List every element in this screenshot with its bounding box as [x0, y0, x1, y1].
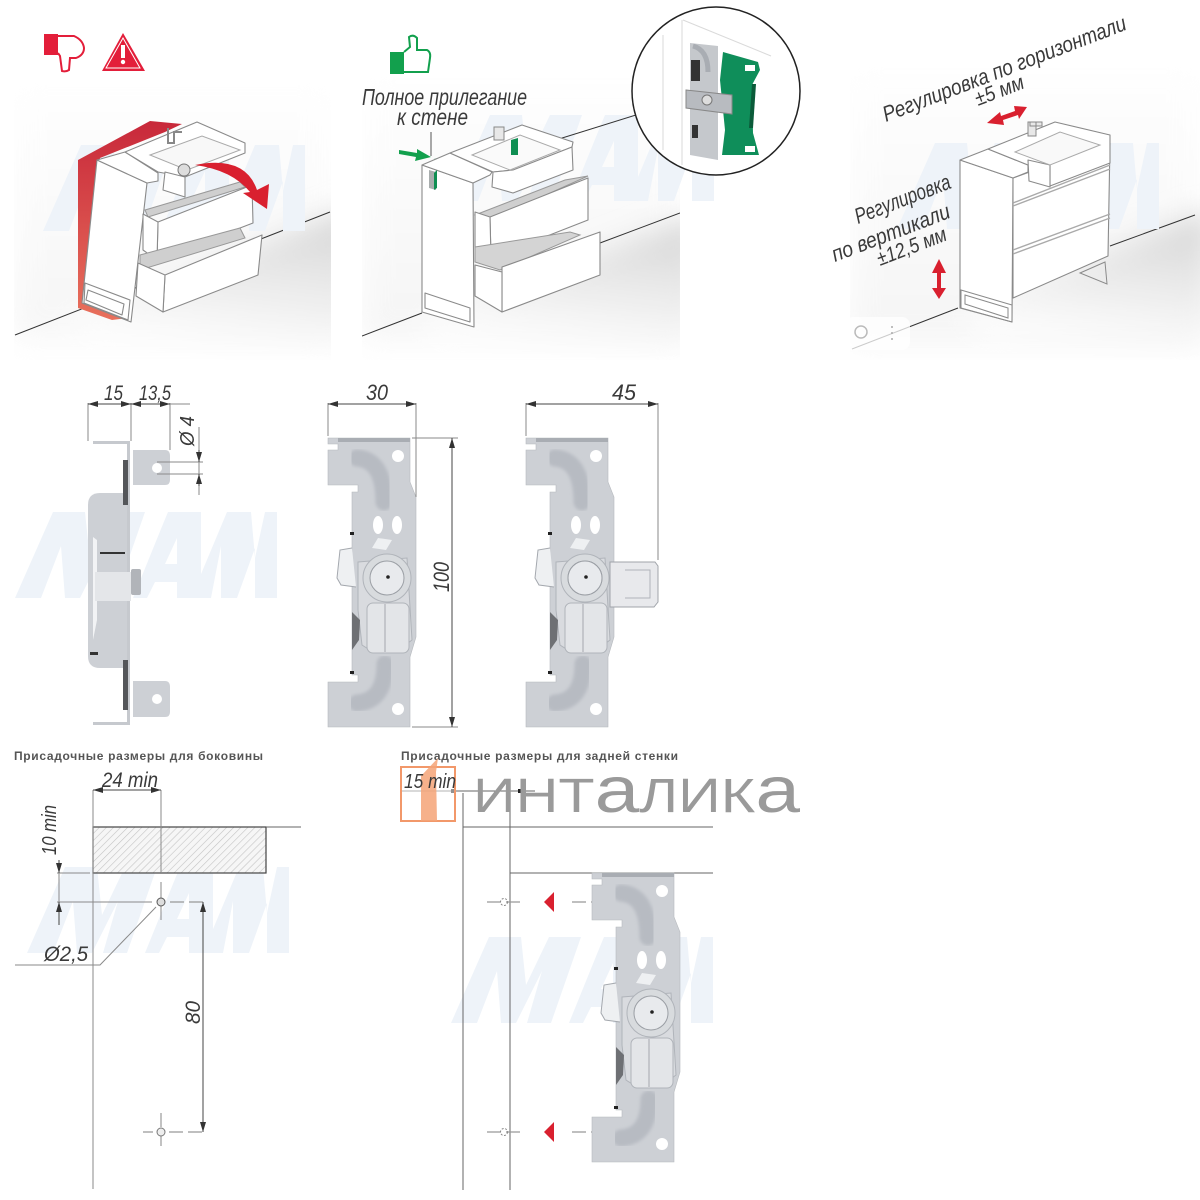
- heading: full wall contact: Полное прилегание: [362, 84, 527, 110]
- red triangle marker bottom: [544, 1122, 554, 1142]
- dimension: 45: 45: [612, 380, 637, 405]
- tilted cabinet: [82, 122, 262, 322]
- panel: back wall drilling dimensions: [400, 749, 801, 1190]
- hatched section: [93, 827, 301, 873]
- label: 80: 80: [182, 1001, 205, 1024]
- callout circle: bracket detail: [632, 7, 800, 175]
- label: 10 min: 10 min: [39, 805, 61, 855]
- dimension: 100: [412, 438, 458, 727]
- pointer line: [430, 132, 432, 156]
- watermark: [897, 143, 1159, 229]
- watermark: [451, 937, 713, 1023]
- back wall bracket: [592, 873, 680, 1162]
- panel: wrong installation: [14, 33, 331, 336]
- heading: full wall contact: [362, 84, 527, 130]
- dimension lines: [15, 790, 207, 1189]
- tipping arrow: [195, 163, 269, 209]
- watermark: [452, 115, 714, 201]
- icon: thumbs down: [44, 34, 84, 71]
- heading: vertical adjustment: по вертикали: [828, 199, 953, 267]
- sink: [125, 122, 245, 177]
- panel: side drilling dimensions: [14, 749, 301, 1189]
- heading: vertical adjustment: [828, 169, 954, 271]
- logo: Inталика: ИНТ аЛИК а: [473, 753, 801, 826]
- dimensions: 15 and 13,5: [88, 382, 190, 450]
- heading: Присадочные размеры для задней стенки: [401, 749, 678, 763]
- green arrows: [399, 149, 461, 167]
- sink: [450, 125, 573, 172]
- heading: full wall contact: к стене: [397, 104, 468, 130]
- red gap behind cabinet: [78, 121, 182, 320]
- wall and floor shading: [852, 202, 1200, 350]
- cabinet: [960, 122, 1110, 322]
- wall and floor shading: [14, 202, 331, 336]
- arrow: horizontal: [987, 106, 1027, 125]
- drawers: [145, 182, 245, 217]
- heading: vertical adjustment: ±12,5 мм: [874, 223, 950, 271]
- red triangle marker top: [544, 892, 554, 912]
- dimension: diameter 4: Ø 4: [177, 416, 199, 447]
- label: 24 min: 24 min: [101, 769, 158, 792]
- dimension: 45: [526, 380, 658, 560]
- dimensions: 15 and 13,5: 13,5: [139, 382, 171, 405]
- image search widget: [845, 317, 910, 350]
- panel: side view bracket drawing: [15, 380, 658, 727]
- side view bracket: [88, 441, 170, 725]
- icon: warning triangle: [102, 33, 145, 71]
- drawers: [475, 176, 588, 220]
- panel: adjustment: [828, 11, 1200, 350]
- label: 15 min: 15 min: [404, 771, 456, 793]
- heading: Присадочные размеры для боковины: [14, 749, 263, 763]
- icon: thumbs up: [390, 36, 430, 74]
- dimension: 30: [328, 380, 416, 497]
- wall line to callout: [530, 115, 636, 148]
- dimension lines: [400, 789, 713, 1190]
- front bracket 30: [328, 438, 416, 727]
- label: diameter 2,5: Ø2,5: [43, 943, 88, 966]
- dimension: 100: 100: [429, 561, 454, 592]
- heading: horizontal adjustment: ±5 мм: [972, 71, 1027, 111]
- dimension: 30: 30: [366, 380, 389, 405]
- watermark: [27, 867, 289, 953]
- panel: correct installation: [362, 7, 800, 345]
- watermark: [43, 145, 305, 231]
- watermark: [15, 512, 277, 598]
- wall and floor shading: [362, 208, 680, 336]
- front bracket 45 extended: [526, 438, 658, 727]
- cabinet: [422, 125, 600, 327]
- dimensions: 15 and 13,5: 15: [104, 382, 123, 405]
- arrow: vertical: [932, 259, 946, 299]
- heading: vertical adjustment: Регулировка: [851, 169, 954, 229]
- dimension: diameter 4: [157, 416, 203, 495]
